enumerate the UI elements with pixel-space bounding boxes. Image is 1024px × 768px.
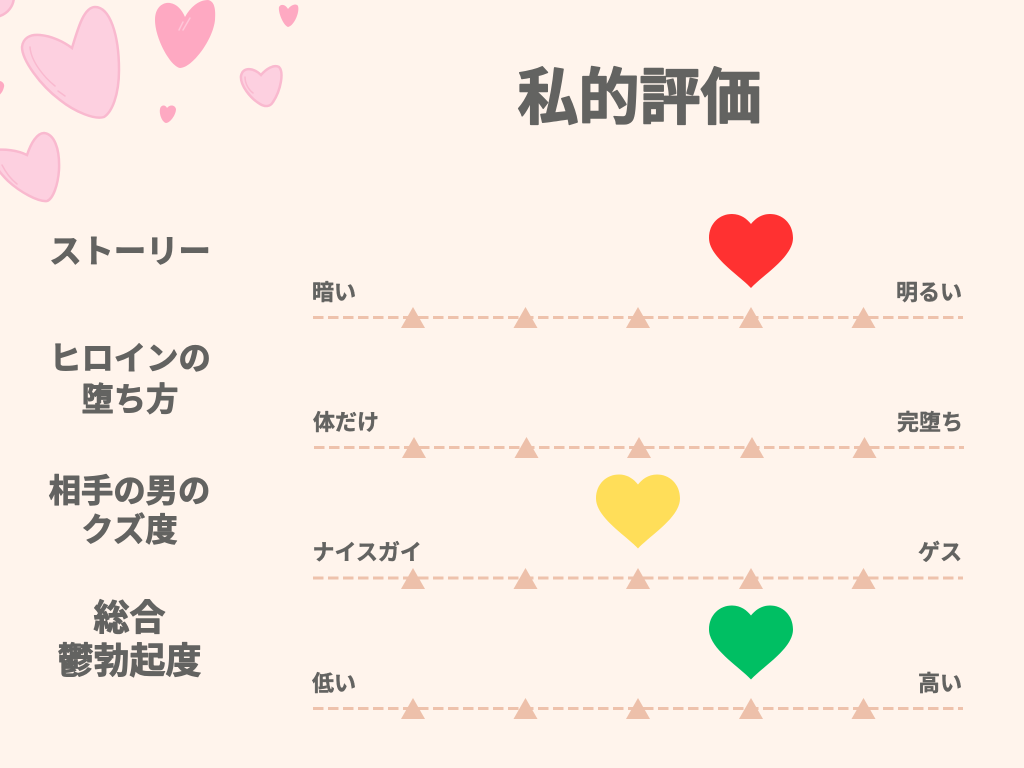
label: overall: 鬱勃起度	[57, 640, 202, 681]
left label: 低い	[312, 671, 356, 696]
tick marks	[401, 568, 876, 589]
right label: 明るい	[896, 280, 962, 305]
icon: deep pink heart	[155, 0, 215, 68]
icon: green heart	[709, 606, 793, 680]
tick marks	[402, 437, 876, 458]
icon: red heart	[709, 214, 793, 288]
icon: small deep pink heart top right	[279, 5, 298, 27]
icon: lower left pink heart	[0, 133, 59, 201]
label: heroine: 堕ち方	[82, 382, 178, 418]
left label: 暗い	[312, 280, 356, 305]
label: overall: 総合	[93, 597, 166, 638]
icon: medium pink heart	[241, 66, 281, 106]
label: partner: 相手の男の	[49, 473, 210, 509]
label: heroine	[49, 340, 211, 418]
label: partner	[49, 473, 210, 548]
scale row 4	[312, 606, 963, 719]
scale row 1	[312, 214, 963, 328]
left label: ナイスガイ	[312, 540, 422, 565]
label: story: ストーリー	[49, 234, 211, 270]
right label: 高い	[918, 671, 962, 696]
icon: yellow heart	[596, 474, 680, 548]
label: heroine: ヒロインの	[49, 340, 211, 376]
deep heart shine	[179, 18, 190, 30]
left label: 体だけ	[313, 410, 379, 435]
label: overall	[57, 597, 202, 681]
icon: edge heart left	[0, 81, 4, 96]
tick marks	[401, 698, 876, 719]
scale row 3	[312, 474, 963, 589]
tick marks	[401, 307, 876, 328]
title: 私的評価	[517, 64, 762, 132]
icon: tiny deep pink heart	[160, 105, 176, 123]
scale row 2	[313, 410, 964, 458]
right label: 完堕ち	[897, 410, 963, 435]
label: partner: クズ度	[81, 512, 178, 548]
right label: ゲス	[918, 540, 962, 565]
icon: corner heart top left	[0, 0, 14, 17]
heart highlights	[2, 47, 253, 184]
icon: large pink heart	[22, 7, 119, 118]
decorative pink hearts	[0, 0, 298, 201]
